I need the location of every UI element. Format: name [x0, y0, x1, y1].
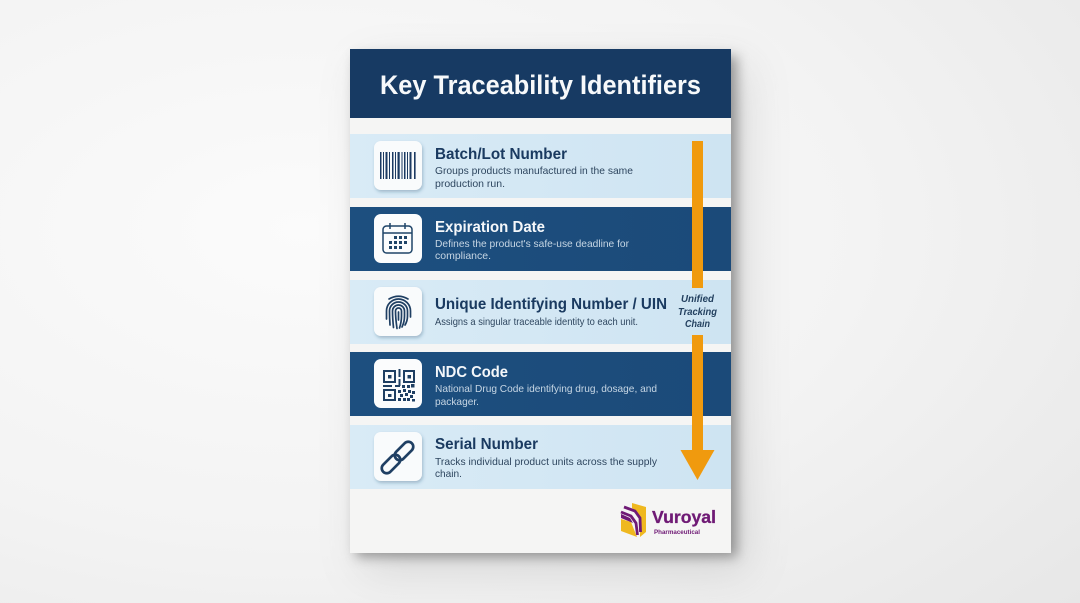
arrow: unified tracking chain: [680, 141, 714, 480]
logo: Vuroyal Pharmaceutical: [621, 503, 716, 537]
row description: [435, 383, 657, 408]
logo name: Vuroyal: [652, 507, 716, 527]
arrow label: Tracking: [678, 307, 717, 318]
header band with title: Key Traceability Identifiers: [380, 70, 701, 100]
row heading: NDC Code: [435, 364, 508, 381]
row description: [435, 456, 658, 480]
icon: QR code: [374, 359, 422, 408]
row description: packager.: [435, 396, 479, 408]
panel: poster card: [350, 49, 747, 571]
row description: Tracks individual product units across the supply: [435, 456, 658, 468]
row heading: Batch/Lot Number: [435, 146, 567, 163]
arrow label: [678, 294, 717, 330]
row heading: Expiration Date: [435, 219, 545, 236]
row heading: Serial Number: [435, 436, 538, 453]
row heading: Unique Identifying Number / UIN: [435, 296, 667, 313]
row: Unique Identifying Number / UIN: [350, 280, 731, 344]
row: Batch/Lot Number: [350, 134, 731, 198]
row description: chain.: [435, 468, 462, 480]
row description: production run.: [435, 178, 505, 190]
arrow label: Unified: [681, 294, 715, 305]
row: Expiration Date: [350, 207, 731, 271]
row description: Assigns a singular traceable identity to each unit.: [435, 316, 638, 328]
row description: National Drug Code identifying drug, dosage, and: [435, 383, 657, 395]
icon: calendar: [374, 214, 422, 263]
row description: [435, 238, 629, 262]
row description: Defines the product's safe-use deadline for: [435, 238, 629, 250]
arrow label: Chain: [685, 319, 710, 330]
row description: Groups products manufactured in the same: [435, 165, 633, 177]
row: NDC Code: [350, 352, 731, 416]
logo tagline: Pharmaceutical: [654, 529, 700, 536]
icon: barcode: [374, 141, 422, 190]
icon: fingerprint: [374, 287, 422, 336]
row: Serial Number: [350, 425, 731, 489]
logo mark: [621, 503, 646, 537]
header band with title: [350, 49, 731, 118]
row description: compliance.: [435, 250, 491, 262]
row description: [435, 165, 633, 190]
icon: chain link: [374, 432, 422, 481]
